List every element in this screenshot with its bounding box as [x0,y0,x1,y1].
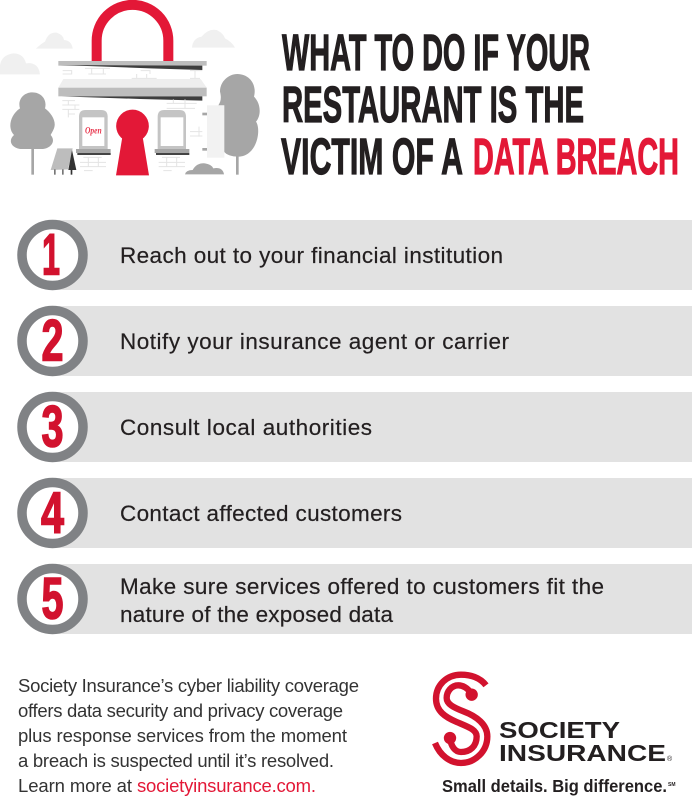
step 4 [22,478,692,548]
title: VICTIM OF A [281,128,463,185]
icon: right tree [218,74,260,175]
icon: sandwich board sign [51,148,76,175]
step 3 [22,392,692,462]
title [281,24,679,185]
step 3: 3 [42,394,64,460]
icon: S mark [435,675,487,763]
step 3: Consult local authorities [120,415,372,440]
wordmark [499,717,673,766]
step 4: 4 [41,480,64,546]
icon: clouds [0,30,235,74]
step 2: 2 [42,308,64,374]
icon: left window with open sign [76,110,111,155]
icon: roof upper [58,61,207,70]
logo: Society Insurance [435,675,676,796]
wordmark: SOCIETY [499,717,620,743]
icon: bush [185,163,224,174]
footer text block: Learn more at [18,775,132,796]
icon: left tree [10,92,55,175]
footer text block: plus response services from the moment [18,725,347,746]
step 5: 5 [42,566,64,632]
step 5: Make sure services offered to customers fit the [120,574,604,599]
icon: right window [155,110,189,155]
tagline: Small details. Big difference. [442,776,667,796]
step 5: nature of the exposed data [120,602,393,627]
tagline: SM [668,782,676,788]
icon: brick patterns [62,68,202,171]
step 2 [22,306,692,376]
open label: Open [85,126,102,136]
wordmark: ® [667,755,673,763]
footer text block: offers data security and privacy coverage [18,700,343,721]
step 4: Contact affected customers [120,501,402,526]
icon: roof lower [58,79,207,101]
icon: keyhole door [116,110,149,175]
icon: padlock shackle [97,5,168,62]
step 2: Notify your insurance agent or carrier [120,329,510,354]
footer text block: Society Insurance’s cyber liability coverage [18,675,359,696]
wordmark: INSURANCE [499,740,666,766]
step 1 [22,220,692,290]
step 5 [22,564,692,634]
footer text block: a breach is suspected until it’s resolved. [18,750,334,771]
footer text block [18,675,359,796]
illustration: restaurant padlock building [0,5,260,175]
icon: side wall panel [202,105,224,158]
step 1: Reach out to your financial institution [120,243,503,268]
footer text block: societyinsurance.com. [137,775,316,796]
step 1: 1 [42,222,60,288]
